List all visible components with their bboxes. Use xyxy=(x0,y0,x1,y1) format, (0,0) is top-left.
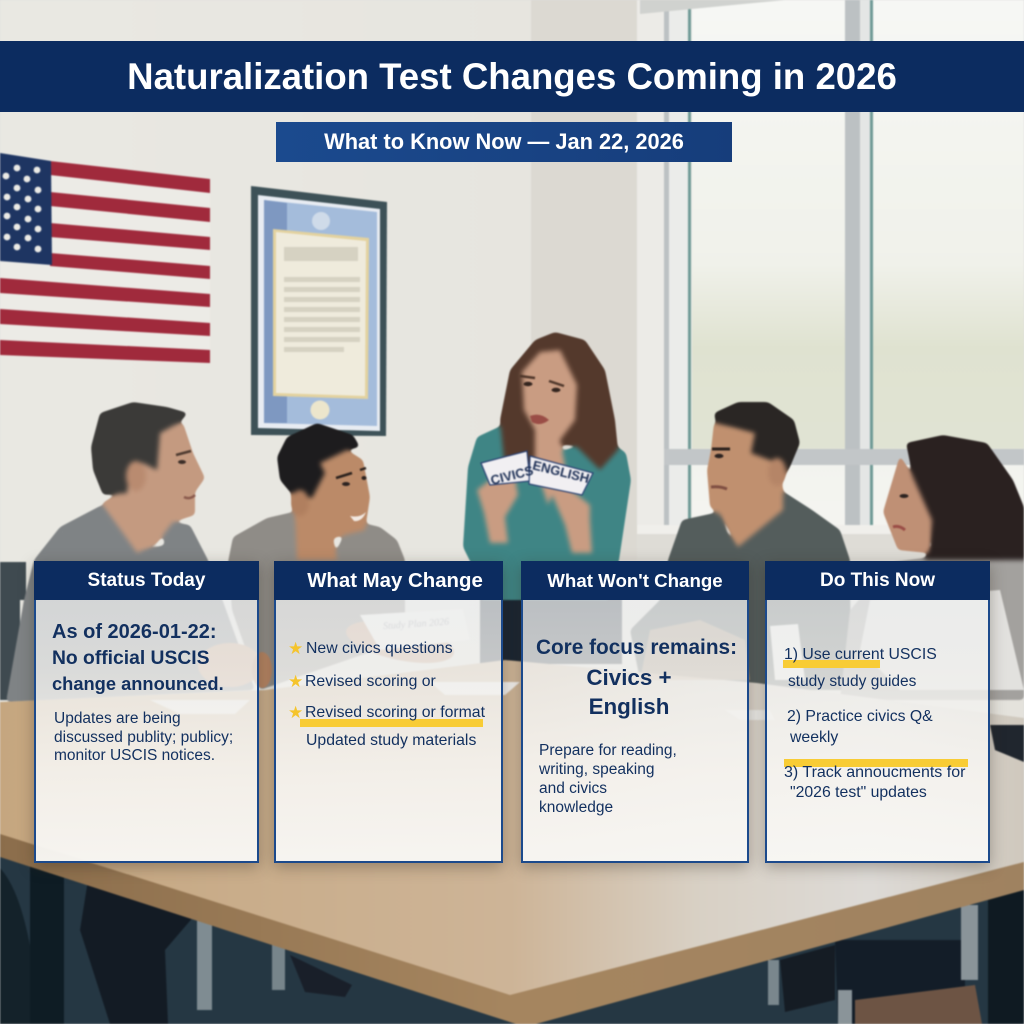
card body xyxy=(521,561,749,863)
change item: New civics questions xyxy=(306,640,453,657)
flag xyxy=(0,153,210,363)
flash cards: ENGLISH xyxy=(531,457,591,486)
study plan paper xyxy=(360,609,470,650)
preparation note: Prepare for reading, xyxy=(539,742,677,759)
table xyxy=(0,590,1024,1024)
highlight xyxy=(783,660,880,668)
person 5 xyxy=(840,435,1024,700)
status headline: change announced. xyxy=(52,673,224,694)
preparation note xyxy=(539,742,677,816)
card heading xyxy=(521,561,749,600)
framed certificate xyxy=(251,186,387,436)
step 1 continued: study study guides xyxy=(788,673,916,690)
card heading: What May Change xyxy=(307,570,483,592)
panel: status today xyxy=(26,556,268,875)
status note: Updates are being xyxy=(54,710,181,727)
person 2 xyxy=(228,423,405,690)
highlight xyxy=(784,759,968,767)
card heading xyxy=(765,561,990,600)
status note: discussed publity; publicy; xyxy=(54,728,233,746)
card body xyxy=(765,561,990,863)
card body xyxy=(34,561,259,863)
step 1: 1) Use current USCIS xyxy=(784,646,937,663)
flash cards xyxy=(481,451,593,495)
card body xyxy=(274,561,503,863)
step 2: 2) Practice civics Q& xyxy=(787,708,933,725)
civics and english headline xyxy=(586,665,672,719)
status headline xyxy=(52,621,224,694)
change item: Revised scoring or format xyxy=(305,704,485,721)
card heading: Do This Now xyxy=(820,570,935,591)
status headline: No official USCIS xyxy=(52,648,209,668)
card heading xyxy=(274,561,503,600)
star icon: ★ xyxy=(288,639,303,658)
study plan paper: Study Plan 2026 xyxy=(383,617,449,632)
status note: monitor USCIS notices. xyxy=(54,747,215,764)
card heading: Status Today xyxy=(88,570,205,591)
highlight xyxy=(300,719,483,727)
person 4 xyxy=(630,402,851,690)
subtitle banner xyxy=(276,122,732,162)
core focus headline: Core focus remains: xyxy=(536,636,737,659)
title banner xyxy=(0,41,1024,112)
change item: Updated study materials xyxy=(306,732,476,749)
floor and table legs xyxy=(0,850,1024,1024)
panel: what may change xyxy=(266,556,512,875)
person 3 xyxy=(463,332,631,664)
change item: Revised scoring or xyxy=(305,673,436,690)
preparation note: knowledge xyxy=(539,799,613,816)
civics and english headline: Civics + xyxy=(586,665,672,690)
person 1 xyxy=(6,402,255,702)
subtitle banner: What to Know Now — Jan 22, 2026 xyxy=(324,129,684,154)
status note xyxy=(54,710,233,764)
window xyxy=(637,0,1024,560)
star icon: ★ xyxy=(288,703,303,722)
preparation note: and civics xyxy=(539,780,607,797)
card heading: What Won't Change xyxy=(547,570,723,591)
star icon: ★ xyxy=(288,672,303,691)
preparation note: writing, speaking xyxy=(539,761,654,778)
civics and english headline: English xyxy=(589,694,669,719)
step 2 continued: weekly xyxy=(790,729,838,746)
step 3: 3) Track annoucments for xyxy=(784,764,965,781)
chair xyxy=(0,562,26,700)
card heading xyxy=(34,561,259,600)
status headline: As of 2026-01-22: xyxy=(52,621,217,643)
panel: what won't change xyxy=(512,556,758,876)
flash cards: CIVICS xyxy=(489,463,535,488)
title banner: Naturalization Test Changes Coming in 2026 xyxy=(127,56,897,97)
step 3 continued: "2026 test" updates xyxy=(790,784,927,801)
